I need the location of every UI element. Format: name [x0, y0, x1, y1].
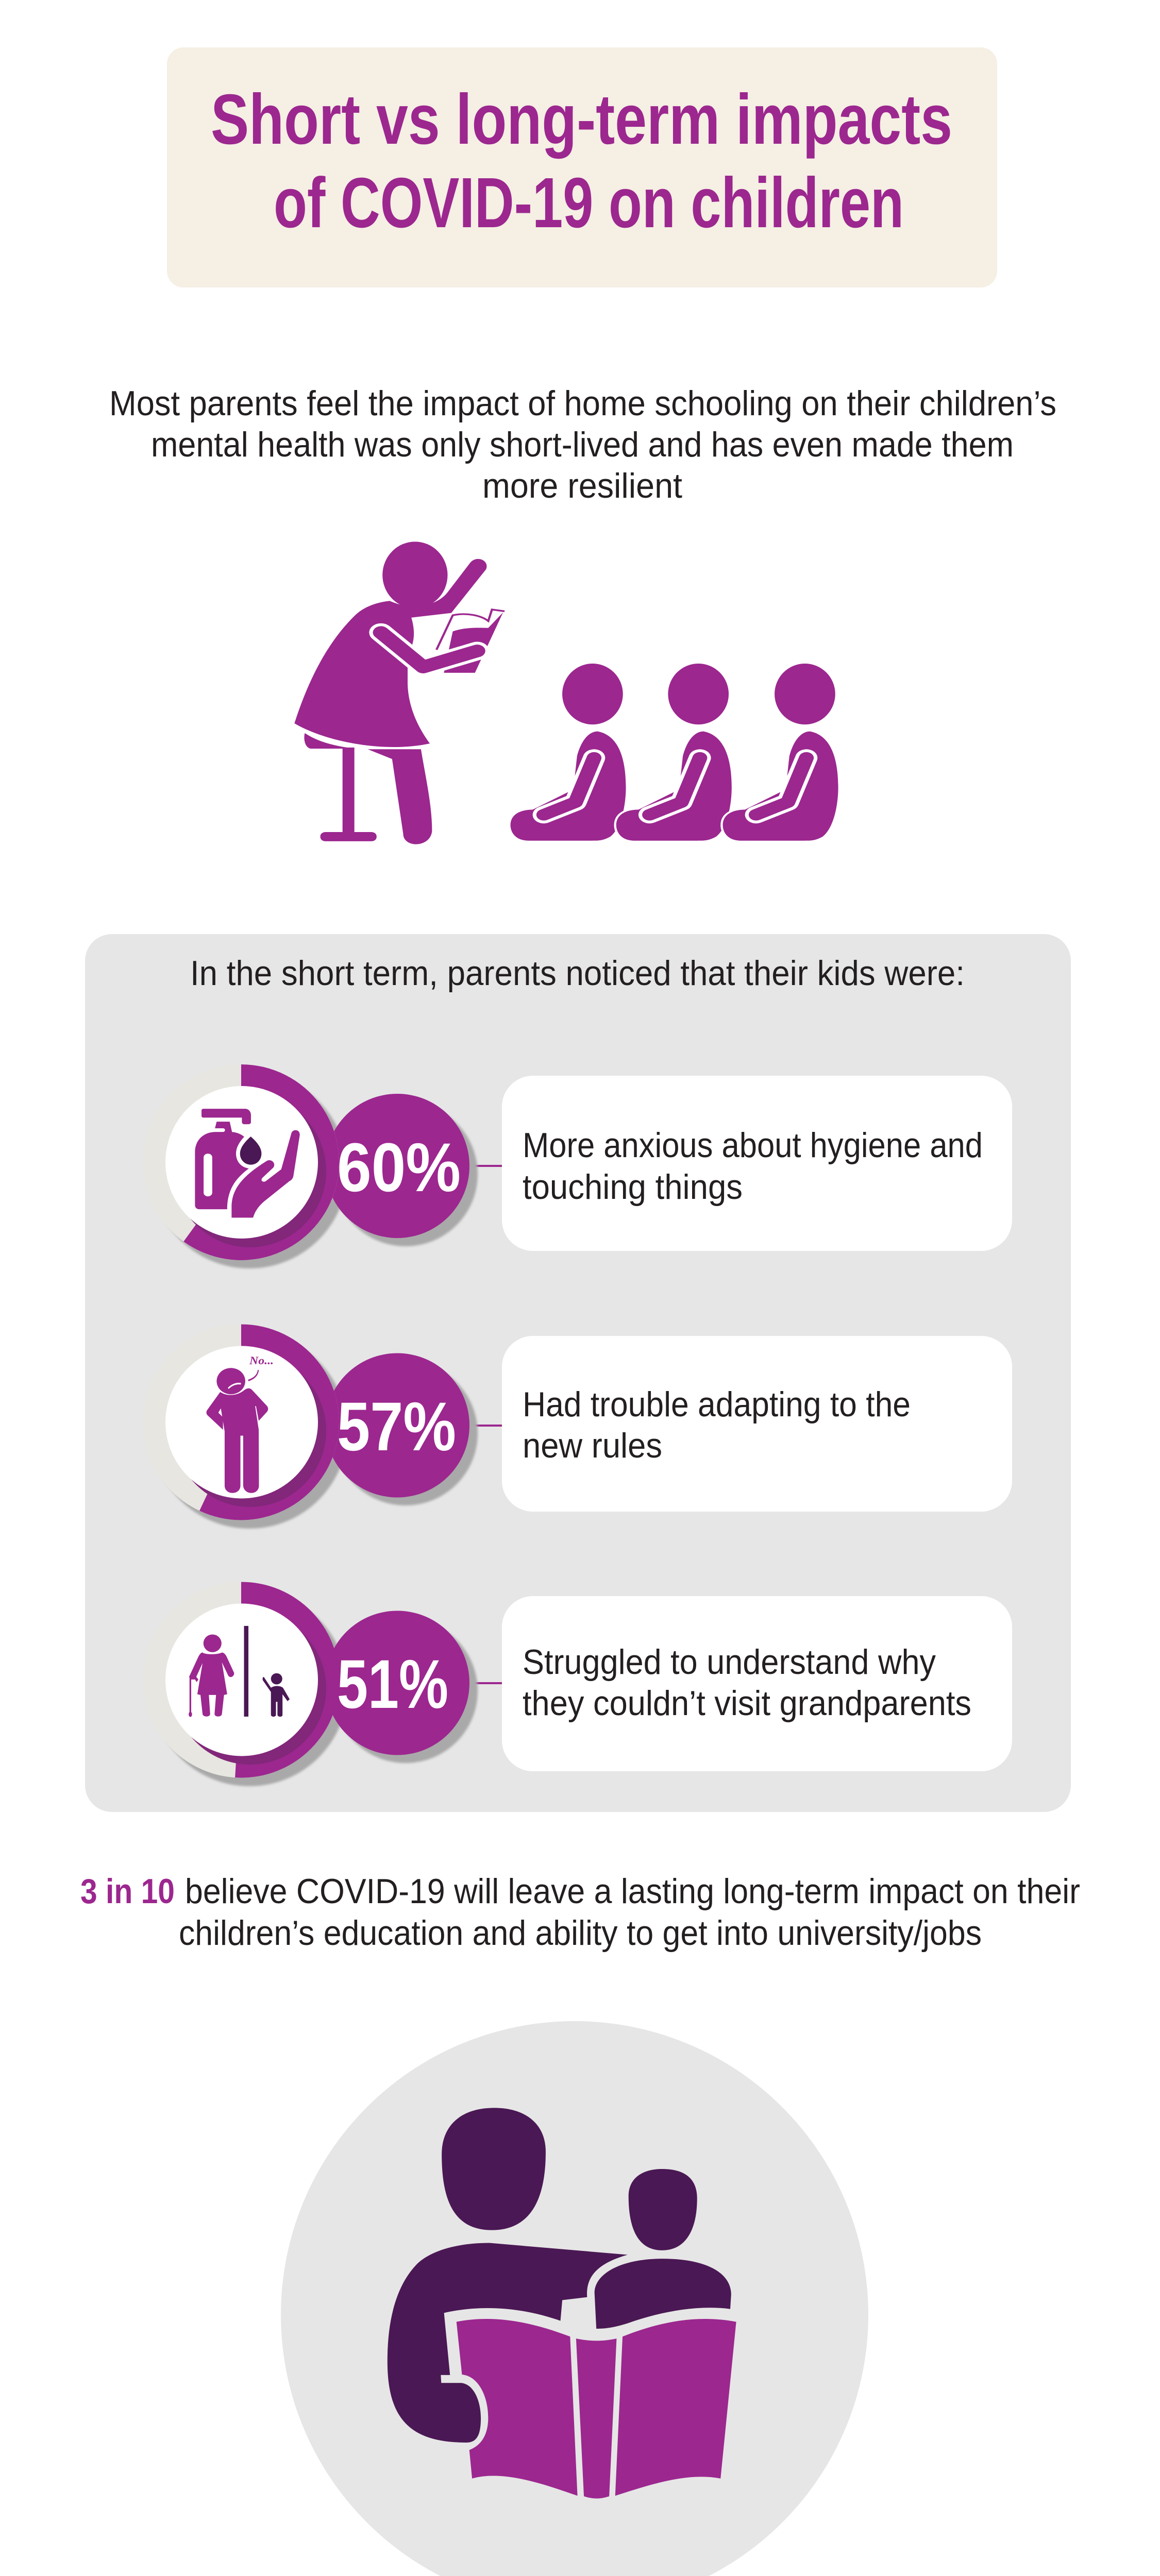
callout text: new rules: [523, 1426, 662, 1465]
callout box: [502, 1076, 1012, 1251]
open book: [457, 2319, 736, 2499]
row: 51 percent grandparents: [143, 1582, 1012, 1786]
callout text: Had trouble adapting to the: [523, 1385, 911, 1424]
icon: child one: [511, 664, 626, 841]
intro text: mental health was only short-lived and has even made them: [151, 425, 1014, 464]
donut chart 60 percent: [143, 1064, 339, 1260]
callout text: More anxious about hygiene and: [523, 1126, 983, 1165]
callout box: [502, 1596, 1012, 1771]
title panel: [167, 47, 997, 287]
row: 57 percent new rules: [143, 1324, 1012, 1529]
donut chart 57 percent: [143, 1324, 339, 1520]
title panel: Short vs long-term impacts: [211, 80, 952, 159]
value 51 percent: 51%: [337, 1646, 448, 1723]
icon: adult and child reading in circle: [281, 2021, 868, 2576]
intro text: [109, 384, 1056, 505]
callout text: [523, 1385, 911, 1465]
long term statement: children’s education and ability to get into university/jobs: [179, 1913, 982, 1953]
title panel: of COVID-19 on children: [274, 163, 904, 243]
icon: child three: [723, 664, 838, 841]
icon: soap and hand: [195, 1109, 300, 1218]
adult figure: [388, 2108, 628, 2443]
icon: teacher reading to three children: [294, 541, 838, 844]
icon: child two: [616, 664, 732, 841]
panel heading: In the short term, parents noticed that their kids were:: [190, 954, 965, 993]
icon: upset child saying no: [207, 1368, 268, 1493]
panel: short term effects: [85, 934, 1071, 1812]
connector line: [466, 1682, 502, 1684]
callout text: touching things: [523, 1167, 743, 1207]
long term statement: [80, 1872, 1080, 1953]
icon: grandmother and child separated: [189, 1626, 290, 1717]
speech text no: No...: [249, 1354, 274, 1367]
row: 60 percent hygiene: [143, 1064, 1012, 1268]
long term statement: believe COVID-19 will leave a lasting long-term impact on their: [185, 1872, 1080, 1911]
icon: teacher: [294, 541, 505, 844]
intro text: more resilient: [482, 466, 682, 505]
callout box: [502, 1336, 1012, 1512]
value 60 percent: 60%: [337, 1129, 461, 1206]
callout text: Struggled to understand why: [523, 1642, 936, 1682]
intro text: Most parents feel the impact of home schooling on their children’s: [109, 384, 1056, 423]
connector line: [466, 1425, 502, 1427]
value 57 percent: 57%: [337, 1388, 456, 1465]
callout text: [523, 1126, 983, 1207]
callout text: [523, 1642, 971, 1723]
connector line: [466, 1165, 502, 1167]
callout text: they couldn’t visit grandparents: [523, 1684, 971, 1723]
donut chart 51 percent: [143, 1582, 339, 1777]
long term statement: 3 in 10: [80, 1872, 175, 1911]
child figure: [595, 2169, 731, 2329]
